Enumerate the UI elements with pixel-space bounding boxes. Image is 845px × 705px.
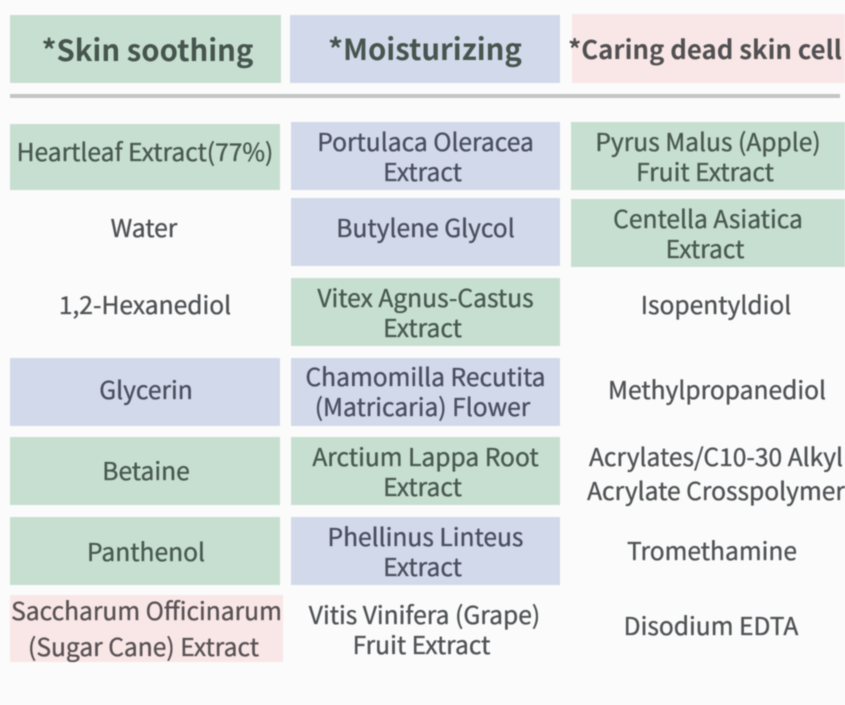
Centella Asiatica Extract: Extract — [666, 230, 744, 266]
heading: skin soothing — [10, 15, 281, 83]
Phellinus Linteus Extract: Phellinus Linteus — [328, 518, 523, 554]
Phellinus Linteus Extract — [291, 517, 560, 585]
Vitex Agnus-Castus Extract: Extract — [383, 309, 462, 345]
Chamomilla Recutita Flower: (Matricaria) Flower — [315, 388, 530, 424]
heading: skin soothing: *Skin soothing — [42, 28, 253, 70]
Acrylates/C10-30 Alkyl Acrylate Crosspolymer — [586, 438, 845, 508]
Heartleaf Extract: Heartleaf Extract(77%) — [17, 133, 273, 169]
Vitex Agnus-Castus Extract: Vitex Agnus-Castus — [317, 279, 534, 315]
Vitis Vinifera Fruit Extract — [308, 596, 540, 662]
Centella Asiatica Extract — [571, 199, 845, 267]
Water: Water — [111, 209, 177, 245]
column 3: caring dead skin cell ingredients — [570, 122, 845, 643]
heading: moisturizing — [290, 15, 560, 83]
Arctium Lappa Root Extract — [291, 437, 560, 505]
Saccharum Officinarum — [10, 595, 283, 662]
header divider — [10, 94, 840, 98]
Pyrus Malus Fruit Extract: Fruit Extract — [636, 152, 774, 188]
Portulaca Oleracea Extract — [291, 122, 560, 190]
Acrylates/C10-30 Alkyl Acrylate Crosspolymer: Acrylate Crosspolymer — [587, 472, 845, 508]
Arctium Lappa Root Extract: Extract — [383, 468, 462, 504]
Pyrus Malus Fruit Extract — [571, 122, 845, 190]
Disodium EDTA: Disodium EDTA — [624, 607, 798, 643]
Acrylates/C10-30 Alkyl Acrylate Crosspolymer: Acrylates/C10-30 Alkyl — [589, 438, 843, 474]
Panthenol — [10, 517, 280, 585]
Vitex Agnus-Castus Extract — [291, 278, 560, 346]
Vitis Vinifera Fruit Extract: Fruit Extract — [353, 626, 490, 662]
Betaine: Betaine — [102, 452, 190, 488]
Butylene Glycol: Butylene Glycol — [336, 209, 515, 245]
Portulaca Oleracea Extract: Extract — [383, 153, 462, 189]
Butylene Glycol — [291, 198, 560, 266]
Betaine — [10, 437, 280, 505]
column 2: moisturizing ingredients — [290, 122, 560, 662]
heading: caring dead skin cell: *Caring dead skin cell — [568, 30, 842, 66]
Phellinus Linteus Extract: Extract — [383, 548, 462, 584]
Centella Asiatica Extract: Centella Asiatica — [613, 200, 803, 236]
Glycerin — [10, 358, 280, 426]
Saccharum Officinarum: Saccharum Officinarum — [11, 592, 282, 628]
Tromethamine: Tromethamine — [627, 532, 797, 568]
column 1: skin soothing ingredients — [10, 124, 283, 664]
Chamomilla Recutita Flower: Chamomilla Recutita — [305, 358, 546, 394]
1,2-Hexanediol: 1,2-Hexanediol — [59, 286, 231, 322]
heading: moisturizing: *Moisturizing — [328, 26, 522, 68]
Saccharum Officinarum: (Sugar Cane) Extract — [28, 628, 259, 664]
heading: caring dead skin cell — [572, 14, 845, 83]
Heartleaf Extract — [10, 124, 280, 190]
Pyrus Malus Fruit Extract: Pyrus Malus (Apple) — [595, 122, 821, 158]
Vitis Vinifera Fruit Extract: Vitis Vinifera (Grape) — [309, 596, 540, 632]
Chamomilla Recutita Flower — [291, 358, 560, 426]
Isopentyldiol: Isopentyldiol — [641, 286, 791, 322]
Arctium Lappa Root Extract: Arctium Lappa Root — [312, 438, 539, 474]
Panthenol: Panthenol — [87, 533, 205, 569]
Methylpropanediol: Methylpropanediol — [608, 371, 826, 407]
Glycerin: Glycerin — [99, 371, 193, 407]
Portulaca Oleracea Extract: Portulaca Oleracea — [317, 123, 534, 159]
